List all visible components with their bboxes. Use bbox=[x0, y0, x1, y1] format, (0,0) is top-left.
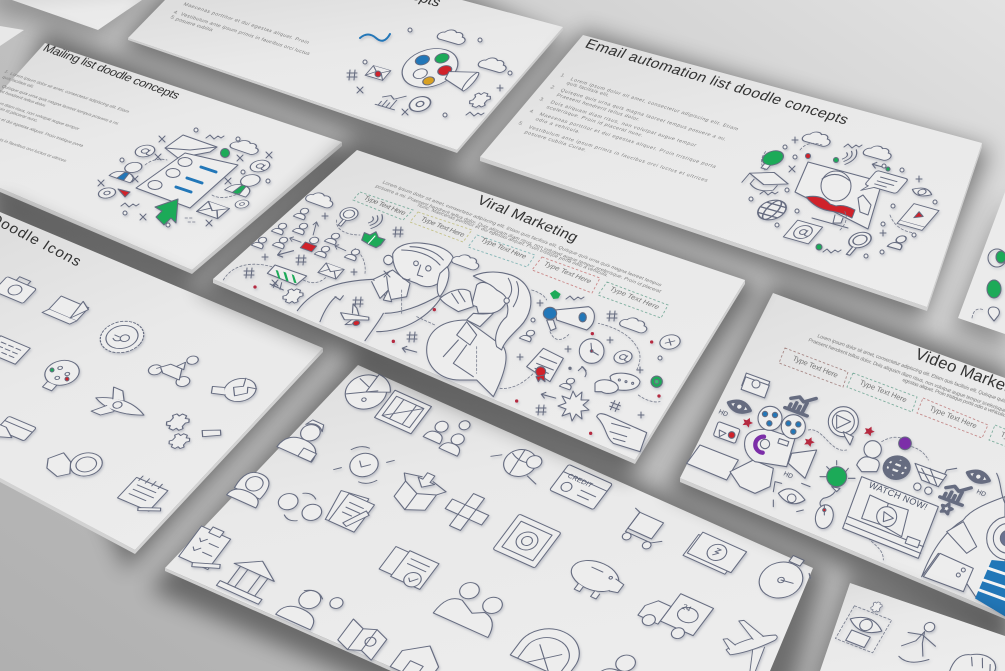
numbered list: Quisque quis urna quis magna laoreet tempus posuere a mi. bbox=[1, 84, 121, 126]
callout boxes: type text here: Type Text Here bbox=[791, 354, 840, 380]
icon: hangar bbox=[510, 620, 591, 671]
numbered list: Lorem ipsum dolor sit amet, consectetur adipiscing elit. Etiam bbox=[9, 72, 131, 114]
icon: clipboard with pencil bbox=[176, 523, 241, 576]
numbered list: Maecenas porttitor et dui egestas aliquet. Proin tristique porta bbox=[538, 112, 717, 170]
icon: purple dot bbox=[899, 437, 911, 450]
numbered list bbox=[0, 69, 131, 163]
icon: cart bbox=[914, 463, 957, 494]
slide title: Viral Marketing bbox=[474, 192, 581, 245]
slide list text: 4. bbox=[172, 10, 180, 16]
icon set: business and logistics doodles: 24 bbox=[680, 602, 694, 613]
numbered list: quis facilisis elit. bbox=[1, 75, 36, 89]
icon: green cursor arrow bbox=[155, 199, 178, 225]
panel: doodle icons slide bbox=[0, 200, 330, 570]
figure: woman whispering bbox=[417, 272, 531, 397]
slide list text: Maecenas porttitor et dui egestas aliquet. Proin bbox=[182, 2, 310, 46]
icon: bank bbox=[216, 552, 284, 604]
icon: pointing hand bbox=[597, 414, 647, 452]
icon: person with blue tie bbox=[109, 159, 149, 183]
icon: safe bbox=[493, 514, 561, 568]
icon: monitor with person bbox=[795, 162, 882, 229]
doodle scene: video marketing bbox=[687, 373, 1005, 618]
panel: mailing list slide bbox=[0, 30, 350, 288]
callout boxes: type text here: Type Text Here bbox=[608, 285, 662, 311]
callout boxes: type text here bbox=[353, 192, 668, 318]
icon: child figure bbox=[857, 441, 881, 472]
panel: top-left slide corner bbox=[0, 0, 152, 46]
callout boxes: type text here: Type Text Here bbox=[928, 404, 979, 430]
icon set: business and logistics doodles bbox=[176, 367, 819, 671]
icon set: business doodles bbox=[0, 273, 262, 518]
icon: globe coins hand bbox=[486, 440, 553, 486]
icon: banknotes bbox=[683, 531, 747, 576]
icon set: business and logistics doodles: CREDIT bbox=[566, 473, 594, 490]
slide title: Mailing list doodle concepts bbox=[40, 42, 183, 102]
panel: bottom right slide bbox=[810, 570, 1005, 671]
slide intro text: egestas aliquet. Proin tristique porta odio a vehicula. bbox=[901, 377, 1005, 419]
icon: map and person bbox=[335, 619, 390, 660]
icon: stopwatch bbox=[751, 549, 819, 605]
icon: contact list card bbox=[136, 153, 238, 208]
callout boxes: type text here bbox=[779, 348, 1005, 456]
icon: shaking hands circle bbox=[333, 442, 395, 488]
icon: megaphone bbox=[543, 307, 594, 340]
icon: watch now video player bbox=[843, 477, 938, 560]
panel: email automation slide bbox=[470, 30, 990, 322]
icon: woman portrait bbox=[227, 468, 276, 508]
illustration: man and woman whispering bbox=[223, 190, 684, 452]
icon: speech bubble bbox=[860, 170, 908, 199]
icon: open box with arrow bbox=[384, 465, 452, 519]
icon: business man bbox=[277, 415, 335, 462]
callout boxes: type text here: Type Text Here bbox=[419, 215, 467, 238]
icon: graduation cap bbox=[740, 167, 793, 195]
doodle cluster: marketing concepts bbox=[347, 27, 512, 117]
callout boxes: type text here: Type Text Here bbox=[479, 236, 529, 260]
numbered list: 1. bbox=[3, 69, 10, 74]
panel: icons grid slide bbox=[150, 350, 825, 671]
panel: viral marketing slide bbox=[198, 135, 760, 478]
icon: computer mouse bbox=[813, 503, 836, 530]
slide intro text: posuere a mi. Praesent hendrerit tellus dolor. Duis aliquam diam risus, non volutpat augue tempor scelerisque. Proin id placerat bbox=[374, 184, 663, 294]
numbered list: posuere cubilia Curae. bbox=[523, 130, 588, 153]
slide intro text: nunc. Maecenas porttitor et dui egestas aliquet. Proin tristique porta odio a vehicula. bbox=[416, 203, 610, 278]
icon: hand holding video camera bbox=[687, 406, 817, 493]
slide title: Email automation list doodle concepts bbox=[582, 36, 852, 128]
slide list text: posuere cubilia bbox=[174, 17, 214, 33]
panel: video marketing slide bbox=[668, 280, 1005, 640]
icon: certificate with red seal bbox=[527, 348, 563, 382]
icon: open envelope bbox=[165, 135, 217, 158]
icon: play circle with cursor bbox=[808, 407, 858, 450]
icon: green light bulb bbox=[820, 461, 855, 508]
icon: two people talking bbox=[421, 410, 479, 456]
icon: eye in focus frame bbox=[773, 482, 810, 512]
numbered list: scelerisque. Proin id placerat nunc. bbox=[545, 105, 645, 139]
icon: speech bubbles bbox=[578, 323, 660, 402]
numbered list: 1. bbox=[559, 73, 567, 79]
icon: photographer with camera bbox=[922, 473, 1005, 618]
icon: piggy bank bbox=[561, 554, 630, 605]
slide intro text: Lorem ipsum dolor sit amet, consectetur adipiscing elit. Etiam quis facilisis elit. Quisque quis urna quis magna laoreet tempus bbox=[381, 180, 663, 288]
panel: top centre slide bbox=[120, 0, 563, 172]
numbered list: Quisque quis urna quis magna laoreet tempus posuere a mi. bbox=[559, 88, 728, 142]
doodle scene: video marketing: HD bbox=[975, 489, 987, 498]
icon: wooden crate bbox=[375, 390, 431, 434]
doodle cluster: email concepts bbox=[740, 130, 939, 258]
icon: person bottom bbox=[597, 649, 646, 671]
numbered list: quis facilisis elit. bbox=[565, 81, 611, 98]
icon: burst bbox=[558, 391, 589, 421]
icon: couple talking bbox=[433, 577, 515, 638]
numbered list: Praesent hendrerit tellus dolor. bbox=[555, 93, 641, 122]
numbered list bbox=[517, 73, 740, 184]
icon: currency exchange coins bbox=[270, 485, 330, 529]
icon: small plane with red mark bbox=[334, 303, 376, 330]
callout boxes: type text here: Type Text Here bbox=[362, 194, 408, 217]
callout boxes: type text here: Type Text Here bbox=[542, 260, 594, 285]
slide list text: 5. bbox=[169, 15, 177, 21]
icon: pie chart percent bbox=[337, 367, 397, 415]
slide intro text: Praesent hendrerit tellus dolor. Duis aliquam diam risus, non volutpat augue tempor scelerisque bbox=[807, 337, 1005, 414]
numbered list: Duis aliquam diam risus, non volutpat augue tempor bbox=[549, 100, 698, 148]
numbered list: 2. bbox=[549, 85, 557, 91]
doodle scene: video marketing: HD bbox=[717, 409, 729, 418]
icon: green light bulb bbox=[755, 149, 787, 171]
numbered list: Vestibulum ante ipsum primis in faucibus orci luctus et ultrices bbox=[527, 125, 709, 184]
slide intro text: Lorem ipsum dolor sit amet, consectetur adipiscing elit. Etiam quis facilisis elit. Quisque quis bbox=[816, 333, 1005, 405]
numbered list: 5. bbox=[517, 121, 525, 127]
numbered list: odio a vehicula. bbox=[534, 117, 582, 135]
icon: man with target bbox=[276, 581, 346, 634]
icon: hand trolley bbox=[615, 508, 674, 553]
icon: house with folder bbox=[390, 638, 448, 671]
icon: book bbox=[897, 204, 939, 230]
icon: delivery truck bbox=[634, 585, 713, 644]
icon: credit card bbox=[550, 464, 612, 510]
icon: airplane bbox=[721, 617, 781, 671]
icon: monitor bar chart bbox=[223, 264, 327, 290]
doodle scene: video marketing: WATCH NOW! bbox=[867, 480, 929, 512]
icon: document with check bbox=[377, 545, 439, 591]
figure: man listening bbox=[297, 243, 453, 341]
icon: signed documents bbox=[321, 487, 378, 533]
doodle scene: video marketing: HD bbox=[782, 471, 794, 480]
numbered list: 3. bbox=[538, 97, 546, 103]
numbered list: 4. bbox=[528, 109, 536, 115]
doodle cluster: mailing list bbox=[95, 128, 274, 227]
icon set: eye, runner, fist bbox=[835, 595, 1000, 671]
panel: right edge slide bbox=[952, 192, 1005, 350]
icon: hands square bbox=[437, 488, 497, 536]
callout boxes: type text here: Type Text Here bbox=[858, 378, 909, 404]
icon: clock bbox=[579, 339, 604, 363]
icon: person with green tie bbox=[225, 172, 267, 197]
slide list text: Vestibulum ante ipsum primis in faucibus orci luctus bbox=[179, 12, 312, 57]
numbered list: Lorem ipsum dolor sit amet, consectetur adipiscing elit. Etiam bbox=[569, 77, 740, 132]
icon: banknote stack bbox=[741, 373, 770, 398]
